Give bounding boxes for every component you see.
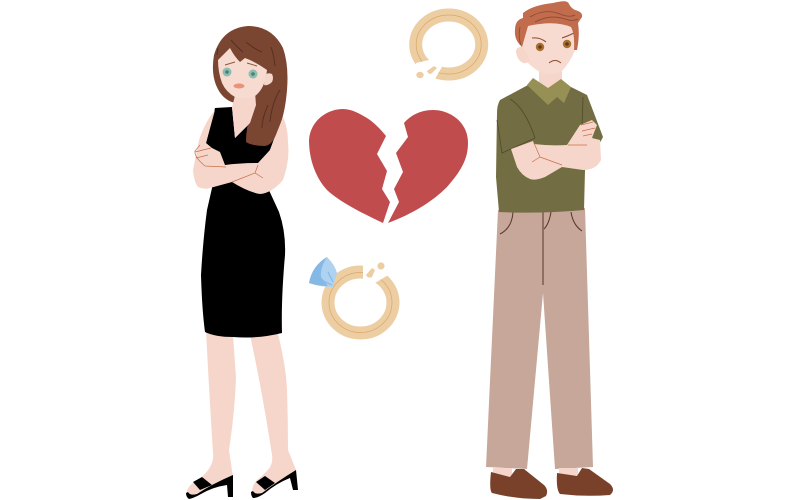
shirt sleeve seams [497, 97, 583, 153]
hair strands [519, 12, 578, 45]
man [486, 1, 613, 499]
trousers [486, 208, 593, 469]
crossed arms [511, 120, 601, 180]
trouser seams [500, 212, 582, 285]
black dress [201, 107, 285, 338]
hair [515, 1, 582, 50]
eyes [222, 68, 232, 76]
right half [388, 110, 468, 223]
legs [187, 330, 296, 498]
ear [516, 47, 530, 63]
ear [264, 73, 273, 85]
broken ring top [414, 15, 482, 84]
brows and mouth [532, 33, 574, 63]
lips [234, 84, 244, 88]
hair strands [217, 40, 280, 128]
olive shirt [496, 85, 603, 213]
neck and face [218, 48, 273, 138]
hair back [213, 26, 288, 146]
sandals [186, 470, 298, 499]
diamond ring bottom [309, 257, 393, 333]
neck and face [516, 19, 577, 92]
woman [186, 26, 298, 499]
left half [309, 109, 390, 223]
broken heart [309, 109, 468, 223]
gem [309, 257, 337, 287]
crossed arms [193, 110, 288, 194]
collar [527, 78, 571, 105]
eyes [536, 43, 544, 51]
ankles [493, 468, 578, 478]
shoes [490, 468, 613, 499]
brows [225, 62, 257, 66]
